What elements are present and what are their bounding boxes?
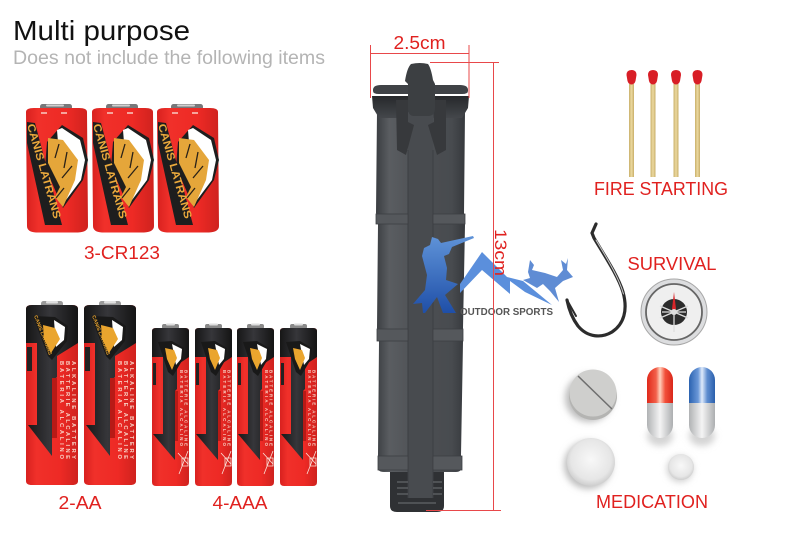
side clips (396, 100, 446, 155)
battery: AAA three: BATTERIE ALCALINE (268, 370, 274, 446)
tube collar (372, 96, 469, 118)
battery: AAA three (237, 324, 274, 486)
label: 4-AAA: 4-AAA (212, 493, 268, 513)
battery: AAA three: BATERIA ALCALINO (264, 370, 269, 447)
battery: AA two: ALKALINE BATTERY (128, 361, 134, 459)
deer (523, 258, 573, 302)
battery: AA two: CANIS LATRANS (90, 315, 111, 357)
battery: AA two (84, 301, 136, 485)
battery: AAA one: BATTERIE ALCALINE (184, 370, 188, 446)
battery: CR123 one (24, 104, 88, 232)
storage tube (372, 63, 469, 512)
subtitle: Does not include the following items (13, 48, 325, 69)
match three (671, 70, 681, 177)
label: 2-AA: 2-AA (58, 493, 102, 513)
battery: AA two: BATERIA ALCALINO (116, 361, 122, 459)
battery: AA one (26, 301, 78, 485)
battery group: 4-AAA (152, 324, 317, 513)
icon: fish hook (567, 224, 625, 336)
battery: AAA one: BATERIA ALCALINO (179, 370, 184, 447)
match four (692, 70, 702, 177)
label: 3-CR123: 3-CR123 (84, 243, 160, 263)
battery: CR123 three (155, 104, 219, 232)
tube bottom cap (390, 468, 444, 512)
hunter silhouette (413, 236, 474, 313)
battery: AAA four: BATERIA ALCALINO (307, 370, 312, 447)
battery: AAA two (195, 324, 232, 486)
battery: AA two: BATTERIE ALCALINE (122, 361, 128, 459)
battery: AA one: BATTERIE ALCALINE (64, 361, 70, 459)
battery: AAA four (280, 324, 317, 486)
battery: CR123 one: CANIS LATRANS (24, 123, 63, 220)
battery group: 3-CR123 (24, 104, 219, 263)
dimension: height 13cm (426, 62, 510, 511)
tube lid (373, 85, 468, 94)
tube body (376, 112, 465, 472)
small ball (667, 454, 694, 482)
battery: AAA four: BATTERIE ALCALINE (312, 370, 316, 446)
title: Multi purpose (13, 15, 190, 46)
watermark logo: outdoor sports (413, 236, 573, 318)
lid strap (405, 63, 435, 116)
bottom cap ridges (397, 482, 442, 503)
tube bands (376, 214, 465, 470)
battery: AAA one (152, 324, 189, 486)
battery: CR123 two (90, 104, 154, 232)
tablet (565, 370, 617, 422)
watermark text: OUTDOOR SPORTS (460, 306, 553, 318)
dimension: height 13cm: 13cm (491, 229, 510, 276)
battery: CR123 two: CANIS LATRANS (90, 123, 129, 220)
battery: AA one: CANIS LATRANS (32, 315, 53, 357)
red capsule (647, 367, 673, 446)
icon: matches (626, 70, 702, 177)
battery: AA one: BATERIA ALCALINO (58, 361, 64, 459)
battery group: 2-AA (26, 301, 136, 513)
battery: AA one: ALKALINE BATTERY (70, 361, 76, 459)
blue capsule (689, 367, 715, 446)
battery: AAA two: BATTERIE ALCALINE (226, 370, 232, 446)
match one (626, 70, 636, 177)
icon: compass (641, 279, 707, 345)
battery: CR123 three: CANIS LATRANS (155, 123, 194, 220)
dimension: width 2.5cm (370, 33, 469, 98)
large ball (564, 438, 615, 489)
label: fire starting: FIRE STARTING (594, 178, 728, 199)
label: survival: SURVIVAL (628, 253, 716, 274)
center strip (408, 112, 433, 498)
match two (648, 70, 658, 177)
battery: AAA two: BATERIA ALCALINO (222, 370, 227, 447)
dimension: width 2.5cm: 2.5cm (394, 33, 446, 53)
mountains (460, 252, 552, 305)
label: medication: MEDICATION (596, 491, 708, 512)
icon: medication (564, 367, 715, 489)
